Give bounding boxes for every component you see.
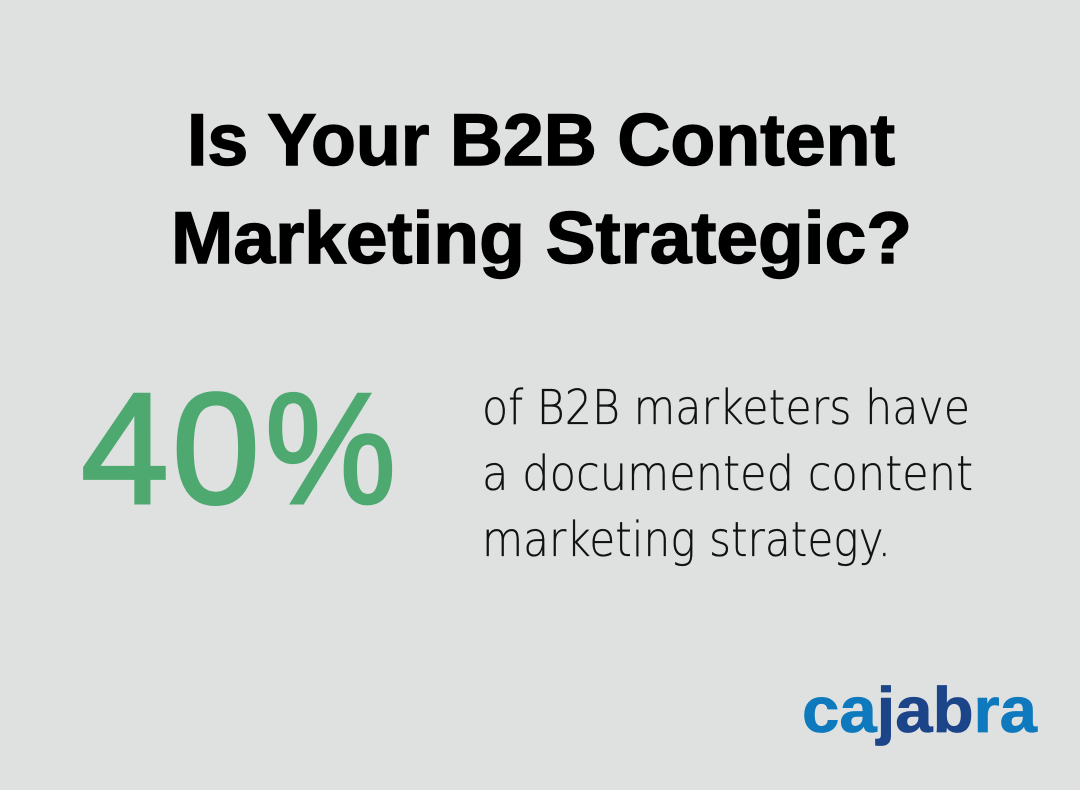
statistic: 40%: 40 [81, 361, 260, 537]
title: Is Your B2B Content [187, 100, 895, 181]
statistic description [482, 380, 973, 568]
title: Marketing Strategic? [171, 198, 912, 279]
logo: cajabra: cajabra [802, 674, 1037, 746]
statistic: 40%: % [265, 361, 396, 537]
statistic description: marketing strategy. [482, 512, 891, 568]
statistic description: of B2B marketers have [482, 380, 970, 436]
title [171, 100, 912, 279]
statistic description: a documented content [482, 446, 973, 502]
statistic: 40% [81, 361, 396, 537]
